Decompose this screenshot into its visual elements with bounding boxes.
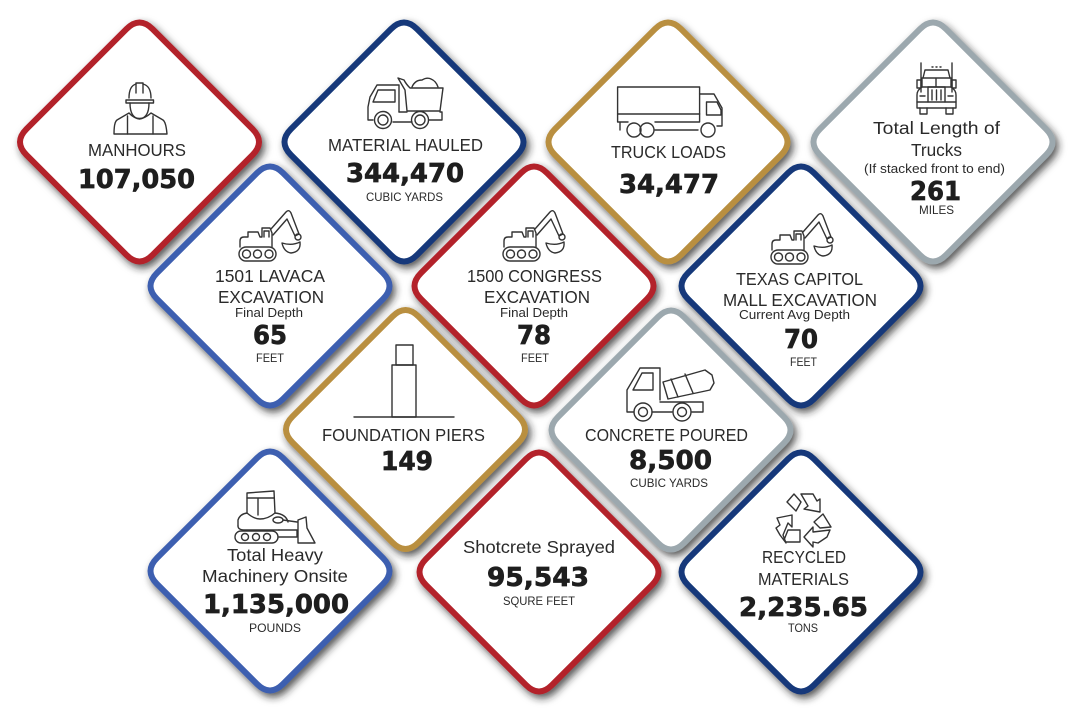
value: 344,470 (346, 159, 464, 189)
value: 70 (784, 325, 818, 355)
label: TEXAS CAPITOL (736, 269, 863, 289)
panel: texas capitol mall excavation (682, 166, 920, 406)
note: Current Avg Depth (739, 307, 850, 322)
diamond frame: heavy machinery (150, 452, 390, 690)
diamond frame: concrete (552, 310, 790, 550)
diamond frame: recycled (682, 452, 920, 692)
diamond frame: lavaca (150, 166, 390, 406)
label: TRUCK LOADS (611, 142, 726, 162)
unit: CUBIC YARDS (630, 476, 708, 490)
label: Total Length of (873, 118, 1000, 138)
value: 149 (381, 447, 433, 477)
unit: CUBIC YARDS (366, 190, 443, 204)
label: Shotcrete Sprayed (463, 537, 615, 557)
note: Final Depth (235, 305, 303, 320)
diamond frame: truck loads (548, 22, 788, 262)
diamond frame: shotcrete (420, 452, 658, 692)
diamond frame: total length (814, 22, 1052, 262)
note: (If stacked front to end) (864, 161, 1005, 176)
value: 107,050 (78, 165, 195, 195)
diamond frame: material hauled (284, 22, 524, 262)
panel: truck loads (548, 22, 788, 262)
value: 34,477 (619, 170, 719, 200)
diamond frame: texas capitol (682, 166, 920, 406)
diamond frame: congress (414, 166, 654, 406)
icon: excavator (239, 211, 301, 261)
note: Final Depth (500, 305, 568, 320)
label: MANHOURS (88, 140, 186, 160)
panel: heavy machinery (150, 452, 390, 690)
value: 8,500 (629, 446, 712, 476)
icon: excavator (503, 211, 565, 261)
diamond frame: foundation (286, 310, 525, 549)
label: RECYCLED (762, 547, 846, 567)
label: FOUNDATION PIERS (322, 425, 485, 445)
label line two: EXCAVATION (484, 287, 590, 307)
label: CONCRETE POURED (585, 425, 748, 445)
label line two: Machinery Onsite (202, 566, 348, 586)
icon: semi truck front (917, 63, 956, 114)
value: 78 (517, 321, 551, 351)
icon: dump truck (368, 78, 443, 128)
panel: foundation piers (286, 310, 525, 549)
icon: recycling arrows (776, 494, 831, 547)
value: 1,135,000 (203, 590, 349, 620)
label: 1501 LAVACA (215, 266, 325, 286)
value: 65 (253, 321, 287, 351)
unit: MILES (919, 203, 954, 217)
value: 95,543 (487, 563, 589, 593)
value: 2,235.65 (739, 593, 868, 623)
icon: concrete mixer truck (627, 368, 714, 421)
panel: recycled materials (682, 452, 920, 692)
panel: 1501 lavaca excavation (150, 166, 390, 406)
label line two: MALL EXCAVATION (723, 290, 877, 310)
icon: excavator (771, 214, 833, 264)
panel: shotcrete sprayed (420, 452, 658, 692)
icon: foundation pier (354, 345, 454, 417)
unit: TONS (788, 621, 818, 635)
panel: material hauled (284, 22, 524, 262)
diamond frame: manhours (20, 22, 259, 262)
unit: FEET (256, 351, 285, 365)
panel: manhours (20, 22, 259, 262)
unit: SQURE FEET (503, 594, 576, 608)
label: 1500 CONGRESS (467, 266, 602, 286)
value: 261 (910, 177, 961, 207)
panel: concrete poured (552, 310, 790, 550)
icon: construction worker (114, 83, 167, 134)
unit: FEET (790, 355, 818, 369)
label: MATERIAL HAULED (328, 135, 483, 155)
label line two: Trucks (911, 140, 962, 160)
panel: 1500 congress excavation (414, 166, 654, 406)
label line two: MATERIALS (758, 569, 849, 589)
icon: bulldozer (235, 491, 315, 543)
icon: box truck (618, 87, 722, 137)
label: Total Heavy (227, 545, 323, 565)
panel: total length of trucks (814, 22, 1052, 262)
unit: FEET (521, 351, 550, 365)
unit: POUNDS (249, 621, 301, 635)
label line two: EXCAVATION (218, 287, 324, 307)
